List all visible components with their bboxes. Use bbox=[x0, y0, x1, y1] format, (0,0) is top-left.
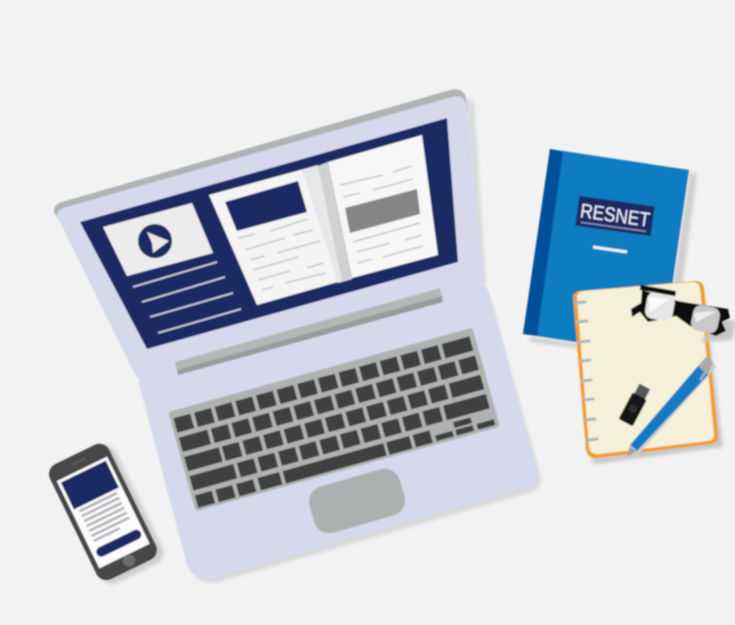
laptop lid bbox=[54, 89, 486, 380]
pen bbox=[627, 356, 714, 457]
laptop base bbox=[139, 280, 541, 583]
video description lines bbox=[133, 262, 241, 333]
hinge bbox=[175, 288, 443, 375]
smartphone bbox=[45, 438, 168, 589]
open e-book bbox=[209, 135, 438, 305]
keyboard bbox=[168, 328, 500, 511]
trackpad bbox=[305, 465, 409, 537]
glasses bbox=[631, 285, 735, 342]
blue RESNET book bbox=[523, 149, 697, 360]
laptop bbox=[54, 89, 541, 583]
notepad bbox=[573, 281, 735, 464]
video panel bbox=[103, 203, 213, 276]
laptop screen bbox=[80, 118, 458, 349]
notepad rings bbox=[575, 302, 597, 440]
RESNET logo: RESNET bbox=[579, 200, 651, 232]
USB drive bbox=[619, 383, 652, 426]
